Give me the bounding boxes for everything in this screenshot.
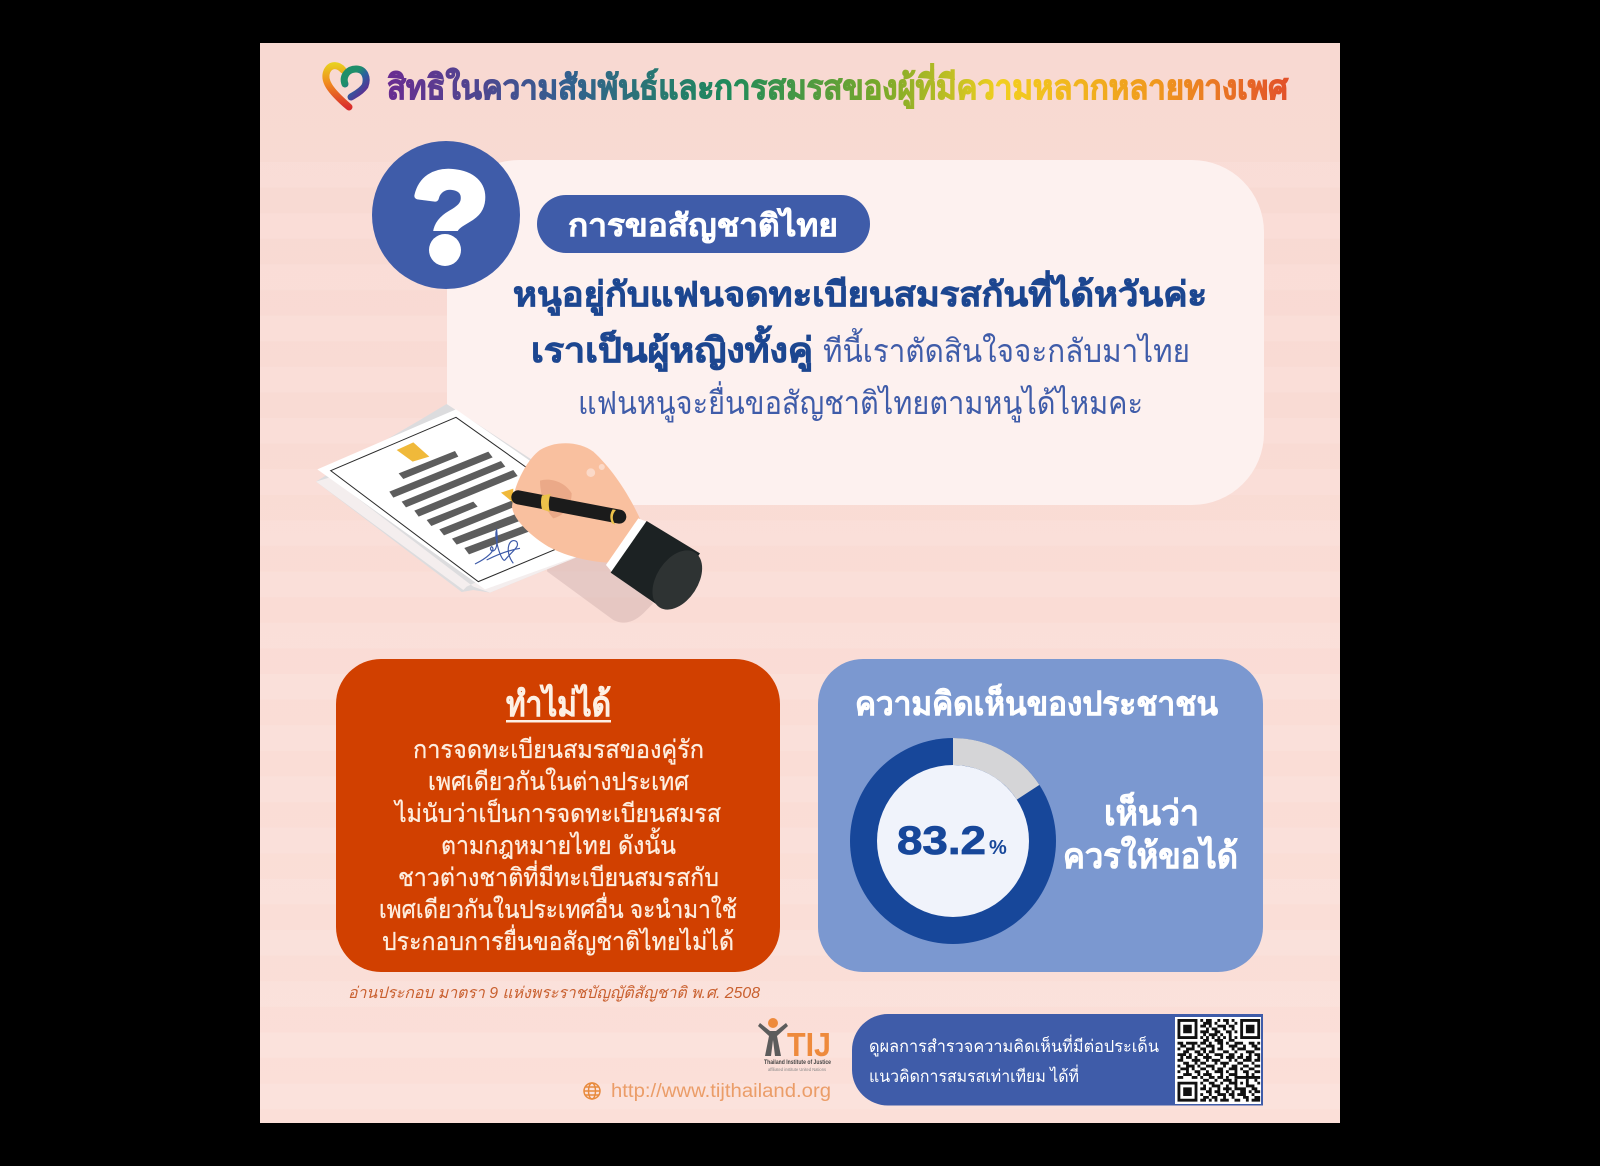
footnote: อ่านประกอบ มาตรา 9 แห่งพระราชบัญญัติสัญชาติ พ.ศ. 2508 (348, 985, 760, 1002)
panel: question bubble (372, 141, 1264, 505)
QR code (1175, 1017, 1261, 1104)
document lines (389, 451, 533, 554)
illustration: hand signing document (316, 404, 712, 623)
title: สิทธิในความสัมพันธ์และการสมรสของผู้ที่มีความหลากหลายทางเพศ (387, 63, 1288, 109)
logo: TIJ: Thailand Institute of Justice (764, 1060, 832, 1066)
icon: figure (758, 1018, 788, 1056)
question text: ทีนี้เราตัดสินใจจะกลับมาไทย (823, 328, 1190, 369)
icon: question mark circle (372, 141, 520, 290)
question text: เราเป็นผู้หญิงทั้งคู่ (531, 325, 813, 372)
background panel (260, 43, 1340, 1123)
question text: แฟนหนูจะยื่นขอสัญชาติไทยตามหนูได้ไหมคะ (578, 381, 1143, 423)
panel heading: ความคิดเห็นของประชาชน (855, 683, 1218, 722)
paper stack (316, 404, 578, 593)
opinion label (1063, 791, 1238, 876)
panel body text: ตามกฎหมายไทย ดังนั้น (441, 827, 676, 860)
percentage: % (989, 837, 1007, 859)
panel heading: ทำไม่ได้ (506, 683, 611, 724)
header: logo and title (326, 63, 1288, 109)
panel body text: ไม่นับว่าเป็นการจดทะเบียนสมรส (393, 798, 721, 828)
panel: cannot do (336, 659, 780, 972)
icon: rainbow heart logo (326, 66, 366, 107)
icon: question mark circle: ? (404, 143, 493, 290)
icon: globe (584, 1083, 600, 1099)
seal (397, 442, 429, 462)
panel body text: การจดทะเบียนสมรสของคู่รัก (413, 736, 704, 765)
logo: TIJ (758, 1018, 832, 1072)
donut chart (850, 738, 1056, 944)
signature (475, 530, 520, 564)
question text: หนูอยู่กับแฟนจดทะเบียนสมรสกันที่ได้หวันค่ะ (513, 270, 1207, 316)
callout: survey link with QR: แนวคิดการสมรสเท่าเทียม ได้ที่ (869, 1064, 1079, 1086)
panel body text: เพศเดียวกันในประเทศอื่น จะนำมาใช้ (379, 892, 737, 924)
topic pill: การขอสัญชาติไทย (568, 207, 838, 244)
panel body text: เพศเดียวกันในต่างประเทศ (428, 767, 689, 796)
topic pill (537, 195, 870, 253)
panel body text: ชาวต่างชาติที่มีทะเบียนสมรสกับ (398, 860, 719, 892)
opinion label: เห็นว่า (1104, 791, 1199, 833)
callout: survey link with QR: ดูผลการสำรวจความคิดเห็นที่มีต่อประเด็น (869, 1034, 1159, 1057)
website link: http://www.tijthailand.org (611, 1081, 831, 1102)
cuff and sleeve (606, 518, 647, 572)
percentage: 83.2 (897, 819, 986, 863)
logo: TIJ: TIJ (787, 1026, 831, 1063)
question text (513, 270, 1207, 423)
logo: TIJ: affiliated institute United Nations (768, 1067, 827, 1072)
hand shadow (543, 550, 653, 623)
document frame (331, 417, 610, 582)
panel body text (379, 736, 737, 956)
callout: survey link with QR (852, 1014, 1263, 1106)
panel body text: ประกอบการยื่นขอสัญชาติไทยไม่ได้ (382, 924, 734, 956)
panel: public opinion (818, 659, 1263, 972)
bubble background (447, 160, 1264, 505)
pen (501, 489, 619, 525)
hand (512, 443, 641, 563)
opinion label: ควรให้ขอได้ (1063, 835, 1238, 876)
